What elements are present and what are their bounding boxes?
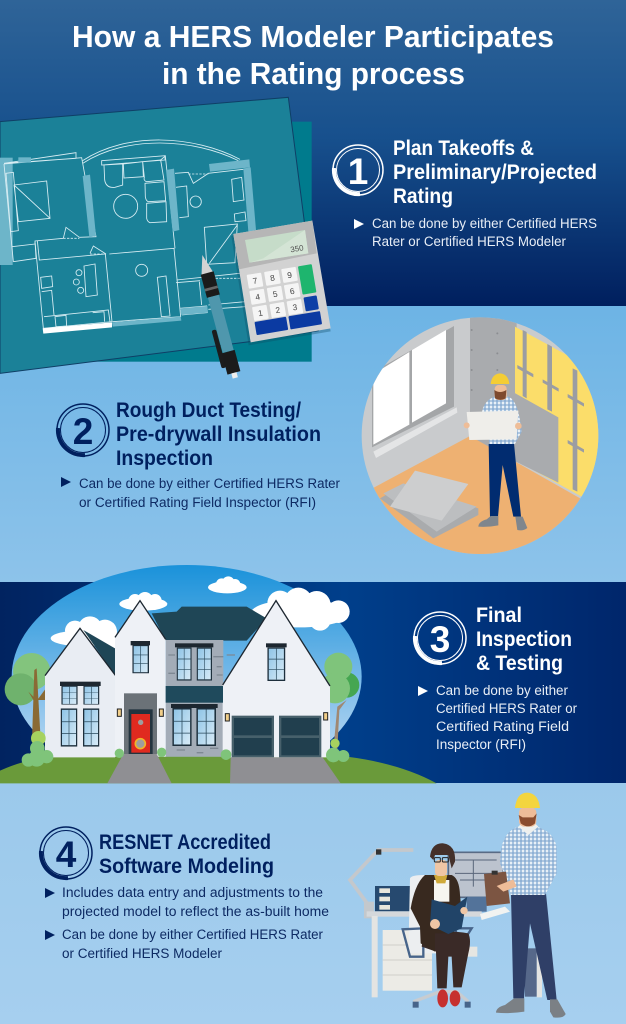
step 1 heading: Rating (393, 185, 453, 208)
entry door (124, 693, 157, 754)
step 4 number badge: 4 (56, 834, 77, 875)
step 3 bullet: Certified HERS Rater or (436, 701, 578, 716)
step 2 bullet: Can be done by either Certified HERS Rater (79, 476, 341, 491)
step 1 heading: Plan Takeoffs & (393, 137, 534, 160)
step 3 heading (476, 604, 572, 675)
builder standing (480, 793, 566, 1018)
brick middle section (166, 640, 223, 757)
step 4 bullets: Includes data entry and adjustments to the (62, 885, 323, 900)
pen (192, 253, 242, 381)
paths (107, 754, 172, 783)
panel: step 2 background (0, 306, 626, 582)
left tree (5, 653, 50, 740)
woman seated (403, 843, 477, 1008)
step 4 heading: RESNET Accredited (99, 831, 271, 854)
title: in the Rating process (162, 56, 465, 91)
step 3 bullet (418, 683, 578, 752)
step 4 bullets: projected model to reflect the as-built home (62, 904, 329, 919)
step 4 bullets: Can be done by either Certified HERS Rater (62, 927, 324, 942)
step 1 bullet (354, 216, 597, 249)
step 2 number badge: 2 (73, 411, 93, 452)
worker (464, 373, 527, 530)
sky dome (12, 565, 362, 788)
step 4 bullets: or Certified HERS Modeler (62, 946, 223, 961)
left gable (45, 628, 115, 757)
bushes (22, 731, 349, 767)
right tree (320, 653, 359, 750)
dark roof (152, 607, 267, 641)
step 2 heading: Inspection (116, 447, 213, 470)
illustration: worker in room with insulation (360, 317, 607, 560)
panel: step 4 background (0, 783, 626, 1024)
step 4 bullets (45, 885, 329, 961)
step 2 bullet: or Certified Rating Field Inspector (RFI) (79, 495, 316, 510)
front blueprint sheet (0, 97, 318, 373)
step 2 heading: Rough Duct Testing/ (116, 399, 301, 422)
step 3 bullet: Inspector (RFI) (436, 737, 526, 752)
step 3 heading: & Testing (476, 652, 563, 675)
desk and equipment (350, 849, 542, 997)
step 2 heading (116, 399, 321, 470)
step 4 number badge (40, 827, 92, 879)
calculator: 3 (292, 302, 298, 312)
calculator: 5 (272, 288, 279, 299)
panel: step 3 background (0, 582, 626, 783)
floor plan (0, 140, 256, 334)
calculator: 7 (252, 275, 258, 286)
step 1 heading: Preliminary/Projected (393, 161, 597, 184)
calculator: 9 (286, 270, 293, 280)
title (72, 19, 554, 91)
calculator: 8 (269, 272, 276, 283)
windows (60, 641, 287, 747)
step 3 number badge (414, 612, 466, 664)
step 1 bullet: Can be done by either Certified HERS (372, 216, 597, 231)
calculator: 6 (289, 286, 296, 296)
step 2 bullet (61, 476, 341, 510)
awning (166, 686, 223, 703)
step 1 bullet: Rater or Certified HERS Modeler (372, 234, 567, 249)
step 1 number badge: 1 (348, 151, 368, 192)
illustration: modeler at desk with builder (350, 793, 566, 1018)
step 1 heading (393, 137, 597, 208)
centre gable (115, 601, 166, 757)
ground (0, 757, 437, 783)
step 3 heading: Inspection (476, 628, 572, 651)
right gable (223, 601, 330, 757)
room scene (360, 317, 607, 560)
step 2 heading: Pre-drywall Insulation (116, 423, 321, 446)
lanterns (117, 709, 328, 721)
step 3 heading: Final (476, 604, 522, 627)
calculator: 1 (257, 308, 264, 318)
step 3 bullet: Can be done by either (436, 683, 569, 698)
step 4 heading: Software Modeling (99, 855, 274, 878)
illustration: blueprint, calculator and pen (0, 97, 331, 381)
title: How a HERS Modeler Participates (72, 19, 554, 54)
calculator: 350 (290, 243, 305, 254)
calculator: 4 (255, 291, 261, 302)
clouds (51, 576, 350, 650)
calculator: 2 (275, 305, 281, 315)
illustration: house with sky dome (0, 565, 437, 788)
calculator (231, 221, 331, 345)
step 3 number badge: 3 (430, 619, 450, 660)
step 1 number badge (333, 145, 383, 195)
step 2 number badge (57, 404, 109, 456)
panel: step 1 background (0, 0, 626, 306)
back blueprint sheet (0, 122, 312, 362)
step 4 heading (99, 831, 274, 878)
step 3 bullet: Certified Rating Field (436, 719, 569, 734)
garage doors (232, 716, 321, 757)
